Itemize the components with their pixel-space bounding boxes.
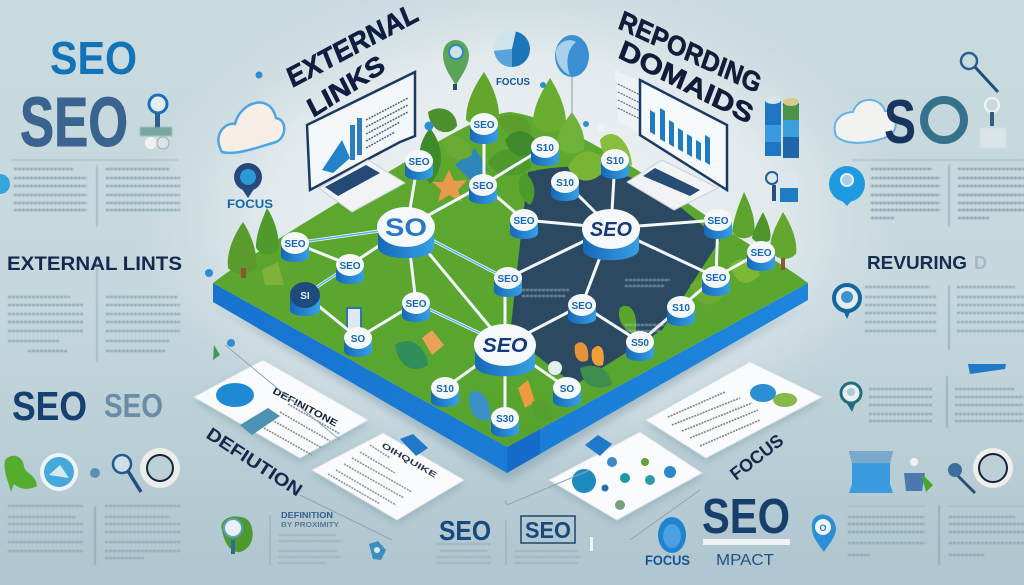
document shadows	[194, 364, 822, 524]
logo: S: S	[884, 88, 916, 157]
label: focus bottom: FOCUS	[645, 552, 690, 568]
trees: left grove	[228, 208, 284, 285]
doc tab	[585, 435, 612, 456]
panel: document definition	[194, 360, 368, 458]
node	[336, 254, 364, 284]
laptop: right	[615, 70, 727, 210]
node	[747, 241, 775, 271]
plants and flowers	[347, 170, 710, 421]
doc image	[240, 408, 280, 435]
heading fragment: D: D	[974, 253, 987, 273]
icon: magnifier cluster	[140, 95, 172, 149]
label: focus top: FOCUS	[496, 77, 530, 88]
icon: white tick	[590, 537, 593, 551]
node	[470, 113, 498, 144]
keyboard	[319, 160, 405, 212]
screen	[307, 72, 415, 190]
screen	[640, 80, 727, 190]
node: SEO	[473, 120, 495, 131]
icon: pin bottom right: O	[819, 523, 827, 533]
logo underline text	[437, 544, 490, 563]
paper extension	[615, 70, 642, 135]
text block: right top	[852, 160, 1024, 227]
doc icon	[216, 383, 254, 407]
platform side	[213, 283, 808, 473]
label: definition rotated: DEFIUTION	[203, 424, 306, 500]
text: definition block	[279, 510, 340, 563]
nodes: small	[281, 113, 775, 437]
node: SEO	[284, 239, 306, 250]
doc heading: DEFINITONE	[271, 386, 339, 429]
node: S10	[536, 143, 554, 154]
node: SEO	[707, 216, 729, 227]
node: SO	[351, 334, 365, 345]
panel: left column	[0, 32, 182, 565]
icon: cloud left	[218, 103, 284, 153]
icon: pin bottom right	[812, 514, 836, 552]
word: domains: DOMAIDS	[615, 34, 758, 130]
text block: right bottom	[848, 505, 1024, 565]
icon: tree pin	[221, 516, 253, 554]
logo: SEO teal: SEO	[439, 515, 491, 546]
icon: small leaf left	[213, 339, 235, 360]
icons row: left bottom	[5, 448, 180, 492]
node: SEO	[408, 157, 430, 168]
icon: stacked cylinders	[765, 96, 799, 158]
panel: document icons	[549, 432, 702, 520]
trees: back grove	[420, 72, 632, 184]
doc circle icon	[572, 469, 596, 493]
icon: blue pin	[829, 166, 865, 206]
label: focus rotated: FOCUS	[726, 430, 787, 484]
word: links: LINKS	[302, 49, 390, 123]
node	[553, 377, 581, 407]
node: SO	[560, 384, 574, 395]
node: hub bottom	[474, 324, 536, 376]
icon: pin dark blue	[834, 285, 860, 319]
icons row: right bottom	[849, 448, 1013, 493]
node	[704, 209, 732, 239]
heading: SEO blue: SEO	[50, 32, 137, 84]
node	[568, 294, 596, 324]
heading: external links	[283, 0, 422, 123]
node	[405, 150, 433, 180]
icon: blue edge dot	[0, 174, 10, 194]
text block: right lower	[869, 376, 1024, 428]
node: SEO	[472, 181, 494, 192]
icon: pin teal	[841, 383, 861, 412]
node	[510, 209, 538, 239]
doc small icons	[602, 457, 676, 510]
shadow under platform	[213, 305, 808, 482]
heading: SEO dark: SEO	[12, 383, 87, 429]
node	[531, 136, 559, 166]
node	[281, 232, 309, 262]
node: S10	[672, 303, 690, 314]
node: SEO	[405, 299, 427, 310]
text block: left top	[12, 160, 180, 227]
text: boxed logo caption	[515, 551, 580, 563]
logo: ring Q	[924, 100, 964, 140]
icon: cloud	[835, 100, 896, 143]
node	[494, 267, 522, 297]
connector lines	[225, 345, 700, 540]
node: hub left: SO	[385, 214, 427, 242]
node	[431, 377, 459, 407]
screen text lines	[366, 98, 408, 148]
heading: reporting domains	[615, 4, 766, 130]
icon: clipboard magnifier right	[766, 172, 798, 202]
node: SEO	[705, 273, 727, 284]
text block: left middle	[8, 262, 180, 362]
icon: teal pin	[369, 541, 386, 560]
doc text lines	[328, 445, 412, 505]
screen bars	[350, 118, 362, 160]
icon: pie top	[494, 31, 530, 67]
icon: blue bar	[968, 364, 1006, 374]
trees: right grove	[690, 192, 796, 305]
node: SEO	[497, 274, 519, 285]
doc text lines	[264, 404, 340, 455]
node: SEO	[571, 301, 593, 312]
word: reporting: REPORDING	[615, 4, 766, 99]
heading: SEO light: SEO	[104, 387, 163, 424]
node: S50	[631, 338, 649, 349]
node: SEO	[750, 248, 772, 259]
doc leaf	[773, 393, 797, 407]
node: hub bottom: SEO	[482, 335, 528, 357]
icon: magnifier top right	[961, 53, 998, 92]
node	[402, 292, 430, 322]
logo: SEO impact: SEO	[702, 490, 790, 544]
node	[491, 407, 519, 437]
dark zone	[510, 167, 720, 385]
node	[702, 266, 730, 296]
heading: revuring d: REVURING	[867, 253, 967, 273]
node	[667, 296, 695, 326]
node	[626, 331, 654, 361]
icon: small dots	[205, 72, 605, 277]
node: S10	[556, 178, 574, 189]
network links	[295, 124, 761, 418]
logo: stylised SEO: SEO	[20, 83, 128, 161]
laptop: left	[307, 72, 415, 212]
node: hub right	[582, 209, 640, 260]
node: dark	[290, 282, 320, 316]
node	[469, 174, 497, 204]
bar: white	[703, 539, 790, 545]
panel: isometric network platform	[213, 72, 808, 473]
node: SEO	[513, 216, 535, 227]
text: definition block: BY PROXIMITY	[281, 522, 339, 529]
icon: green pin top	[443, 40, 469, 90]
panel: document report	[646, 362, 822, 458]
doc text lines	[668, 392, 760, 446]
doc heading: OIHQUIKE	[380, 441, 439, 480]
text block: right middle	[865, 285, 1024, 350]
screen bars	[650, 108, 710, 165]
node: dark: SI	[300, 291, 310, 302]
panel: right column	[829, 53, 1024, 565]
logo: SEO boxed: SEO	[525, 517, 571, 543]
text block: left bottom	[8, 506, 180, 565]
heading: external lints: EXTERNAL LINTS	[7, 254, 182, 275]
screen chart shape	[322, 140, 350, 173]
icon: tools cluster	[980, 98, 1006, 148]
node: SEO	[339, 261, 361, 272]
icon: pin focus left	[234, 163, 262, 198]
node: hub left	[377, 207, 435, 258]
panel: document lines	[312, 433, 464, 520]
icon: balloon top	[555, 35, 589, 118]
node	[601, 149, 629, 179]
node: S30	[496, 414, 514, 425]
node: S10	[606, 156, 624, 167]
blurred labels on map	[522, 280, 670, 331]
platform surface	[213, 112, 808, 447]
doc icon	[750, 384, 776, 402]
label: focus left: FOCUS	[227, 197, 273, 211]
node	[551, 171, 579, 201]
doc tab	[400, 434, 428, 456]
icon: focus ball	[658, 517, 686, 553]
node	[344, 327, 372, 357]
label: mpact: MPACT	[716, 552, 774, 569]
panel: bottom center strip	[221, 490, 836, 569]
text: definition block: DEFINITION	[281, 510, 333, 520]
keyboard	[627, 160, 718, 210]
node: hub right: SEO	[590, 219, 632, 241]
node: S10	[436, 384, 454, 395]
